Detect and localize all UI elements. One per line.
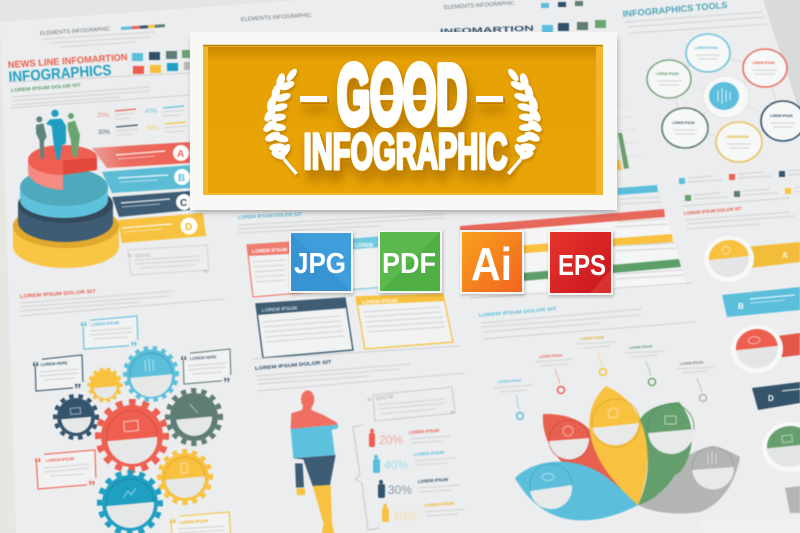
recessed panel	[208, 47, 596, 193]
panel: striped table	[460, 185, 692, 298]
node: blue	[686, 34, 730, 72]
quote box: QUOTE	[376, 394, 395, 402]
panel: petal chart	[479, 306, 740, 520]
title: infographics: INFOGRAPHICS	[8, 62, 112, 86]
quote: red: LOREM IPSUM	[46, 456, 75, 463]
stat: 30%: LOREM IPSUM	[418, 477, 449, 484]
gear: blue	[123, 346, 179, 402]
banner D: D	[185, 222, 192, 233]
band blue	[618, 185, 658, 195]
stats: 20%	[97, 113, 110, 119]
icon: PDF badge: PDF	[382, 248, 436, 280]
icon: laurel right	[507, 68, 543, 174]
band: red C	[770, 333, 800, 358]
quote box: ”	[450, 410, 455, 421]
panel: news line infographic	[7, 24, 209, 280]
title: infomartion fragment: INFOMARTION	[440, 24, 534, 36]
quote: yellow: “	[169, 516, 176, 533]
subheading: LOREM IPSUM DOLOR SIT	[11, 83, 81, 94]
panel: person statistics	[255, 359, 465, 533]
node: centre	[703, 76, 749, 118]
banner D	[118, 213, 206, 243]
panel: centre frame	[190, 32, 617, 212]
bracket	[353, 425, 380, 530]
marker: grey	[676, 360, 714, 402]
dark tier	[18, 204, 113, 242]
stat: 10%	[382, 501, 465, 523]
panel: centre boxes	[238, 1, 606, 359]
blue tier	[20, 188, 108, 218]
icon: laurel left	[262, 68, 298, 174]
colour strip	[121, 24, 165, 30]
band yellow	[500, 234, 673, 255]
band: grey	[785, 486, 800, 513]
gear: red	[95, 399, 169, 473]
band: yellow A: A	[782, 251, 788, 260]
quote box: QUOTE	[135, 253, 151, 258]
icon: JPG badge	[289, 231, 354, 295]
icon: Ai badge	[460, 230, 525, 296]
stat: 40%: 40%	[384, 458, 408, 472]
yellow tier	[13, 224, 119, 268]
marker: blue	[494, 378, 533, 420]
quote: dark right: “	[180, 353, 188, 370]
quote box: “	[367, 397, 372, 408]
node: dark green	[662, 108, 708, 148]
stats: 30%	[98, 130, 111, 136]
bar chart remnant	[617, 104, 642, 170]
stat: 40%	[373, 450, 455, 473]
stat: 20%	[369, 428, 450, 447]
quote box: “	[127, 253, 132, 264]
legend	[679, 170, 800, 201]
stats: 40%	[145, 109, 158, 115]
petal: red	[543, 414, 638, 505]
node: navy	[761, 101, 800, 141]
node: green	[647, 60, 691, 98]
heading: elements infographic: ELEMENTS INFOGRAPHIC	[40, 26, 111, 37]
node: dark green: LOREM IPSUM	[672, 121, 695, 125]
panel: infographics tools	[617, 0, 800, 229]
box: dark: LOREM IPSUM	[262, 306, 297, 314]
gear: dark	[53, 394, 99, 440]
petal: blue	[515, 462, 638, 520]
person: left	[36, 116, 47, 159]
quote: dark left	[32, 355, 84, 398]
icon: PDF badge	[378, 230, 443, 295]
heading: LOREM IPSUM DOLOR SIT	[238, 212, 302, 221]
title: INFOGRAPHICS TOOLS	[622, 0, 728, 19]
heading: infographic: INFOGRAPHIC	[304, 124, 508, 180]
quote box	[367, 387, 455, 421]
circle: green	[760, 419, 800, 475]
stat: 40%: LOREM IPSUM	[414, 450, 445, 457]
box: yellow: LOREM IPSUM	[362, 298, 397, 306]
circle: red	[729, 322, 785, 376]
red tier	[28, 160, 63, 190]
panel: option banners	[702, 234, 800, 513]
quote: blue: ”	[130, 339, 138, 356]
node: red	[743, 49, 787, 87]
quote box	[127, 245, 209, 280]
heading: LOREM IPSUM DOLOR SIT	[20, 289, 96, 300]
gear: teal	[97, 470, 163, 533]
quote: dark left: “	[32, 359, 40, 376]
banner B	[102, 165, 190, 193]
stats: 50%	[147, 126, 160, 132]
quote: dark left: LOREM HERE	[41, 360, 68, 367]
node: green: LOREM IPSUM	[656, 72, 679, 76]
heading: good: GOOD	[337, 48, 467, 142]
circle: yellow	[702, 234, 756, 284]
marker: grey: LOREM IPSUM	[680, 360, 704, 366]
swatches top centre	[541, 1, 606, 33]
gear: small yellow	[88, 368, 122, 402]
heading: LOREM IPSUM DOLOR SIT	[255, 359, 332, 372]
connectors	[669, 53, 783, 142]
icon: Ai badge: Ai	[471, 238, 512, 290]
stat: 20%: LOREM IPSUM	[409, 428, 440, 435]
banner C	[112, 191, 192, 217]
box: blue: LOREM	[355, 243, 373, 249]
heading: LOREM IPSUM DOLOR SIT	[684, 206, 742, 216]
box: red: LOREM IPSUM	[252, 247, 287, 255]
marker: green: LOREM IPSUM	[629, 344, 653, 350]
stat: 20%: 20%	[379, 433, 403, 447]
quote: yellow: LOREM IPSUM	[180, 518, 209, 525]
quote: dark right: LOREM HERE	[190, 354, 217, 361]
white frame	[190, 32, 617, 210]
petal: yellow	[589, 386, 647, 505]
marker: red	[535, 353, 573, 394]
stat: 10%: LOREM IPSUM	[424, 501, 455, 508]
box: blue	[340, 236, 400, 290]
stat: 30%: 30%	[388, 483, 412, 497]
quote: red: “	[34, 455, 42, 472]
colour swatches	[132, 50, 190, 74]
band: blue B	[722, 287, 800, 317]
marker: yellow	[577, 335, 615, 376]
title: news line infomartion: NEWS LINE INFOMARTION	[7, 51, 128, 70]
panel: gears	[20, 289, 233, 533]
quote: yellow	[168, 512, 231, 533]
banner A	[92, 142, 190, 168]
person: centre	[46, 110, 66, 160]
band red	[460, 209, 665, 234]
person: right	[68, 113, 80, 157]
petal: grey	[638, 446, 740, 514]
quote: dark right	[180, 349, 233, 392]
banner C: C	[180, 198, 187, 209]
box: red	[247, 241, 312, 297]
band: yellow A	[745, 242, 800, 268]
stat: 30%	[378, 477, 460, 498]
quote: red: ”	[88, 478, 96, 495]
quote: blue	[80, 316, 140, 356]
quote: red	[33, 450, 98, 495]
quote: blue: LOREM IPSUM	[91, 320, 120, 327]
stats	[97, 106, 188, 136]
frame shadow	[192, 38, 617, 212]
heading: good	[300, 48, 503, 142]
band: blue B: B	[738, 302, 744, 311]
yellow lip	[203, 45, 603, 195]
box: yellow	[356, 294, 453, 349]
quote: dark left: ”	[74, 381, 82, 398]
band green	[500, 259, 681, 283]
panel: centre boxes: ELEMENTS INFOGRAPHIC	[241, 13, 312, 23]
band: dark D: D	[768, 394, 774, 403]
banner B: B	[178, 173, 185, 184]
box: dark	[256, 298, 353, 358]
gear: grey green	[165, 388, 223, 446]
stat: 10%: 10%	[393, 509, 417, 523]
node: navy: LOREM IPSUM	[770, 114, 793, 118]
quote box: ”	[203, 269, 208, 280]
node: red: LOREM IPSUM	[752, 61, 775, 65]
heading: LOREM IPSUM DOLOR SIT	[479, 306, 557, 319]
marker: red: LOREM IPSUM	[539, 353, 563, 359]
icon: JPG badge: JPG	[294, 248, 346, 280]
panel: centre boxes: ELEMENTS INFOGRAPHIC	[444, 1, 515, 11]
quote: blue: “	[80, 319, 88, 336]
gear: yellow	[157, 449, 213, 505]
marker: blue: LOREM IPSUM	[498, 378, 522, 384]
marker: green	[625, 344, 664, 386]
node: yellow: LOREM IPSUM	[726, 135, 749, 139]
quote: dark right: ”	[223, 375, 230, 392]
node: blue: LOREM IPSUM	[695, 46, 718, 50]
node: yellow	[716, 122, 762, 162]
petal: green	[638, 402, 694, 505]
marker: yellow: LOREM IPSUM	[581, 335, 605, 341]
icon: EPS badge: EPS	[558, 250, 606, 282]
banner A: A	[177, 149, 184, 160]
band: dark D	[752, 382, 800, 410]
stacked cylinder chart	[13, 110, 119, 268]
person silhouette	[291, 390, 338, 533]
icon: EPS badge	[548, 230, 614, 297]
